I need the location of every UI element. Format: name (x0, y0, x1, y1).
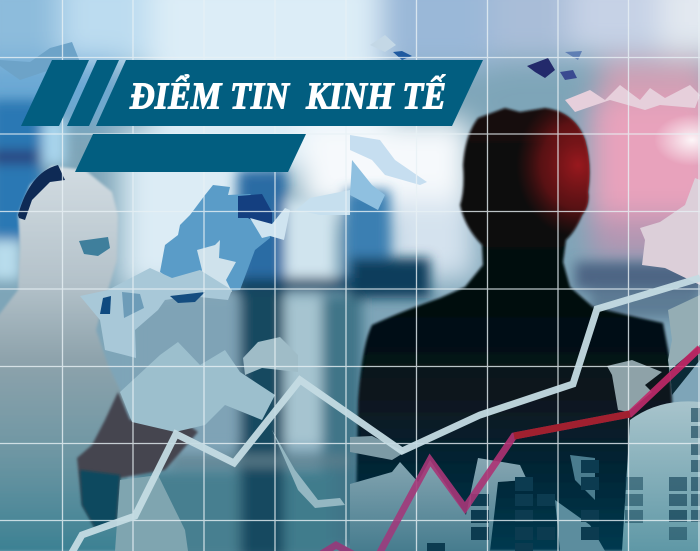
banner: main strip (96, 60, 483, 126)
world map: Europe (80, 268, 345, 551)
banner: left stripe 1 (21, 60, 89, 126)
white line chart series (70, 278, 700, 551)
dark hand shape (77, 392, 198, 528)
world map: blue land at left centre (160, 185, 350, 292)
hair (18, 165, 65, 220)
banner: lower strip (75, 134, 306, 172)
pink line chart series (318, 348, 700, 551)
silhouette: man at right (355, 93, 680, 551)
silhouette: woman at left (0, 165, 198, 551)
bar columns on the chart (427, 408, 700, 551)
world map: top right and centre islands (0, 35, 700, 285)
face shadow (79, 237, 110, 256)
title text: ĐIỂM TIN KINH TẾ (129, 74, 446, 118)
world map: lower centre and right land (350, 295, 700, 551)
title banner (21, 60, 483, 172)
banner: left stripe 2 (67, 60, 119, 126)
